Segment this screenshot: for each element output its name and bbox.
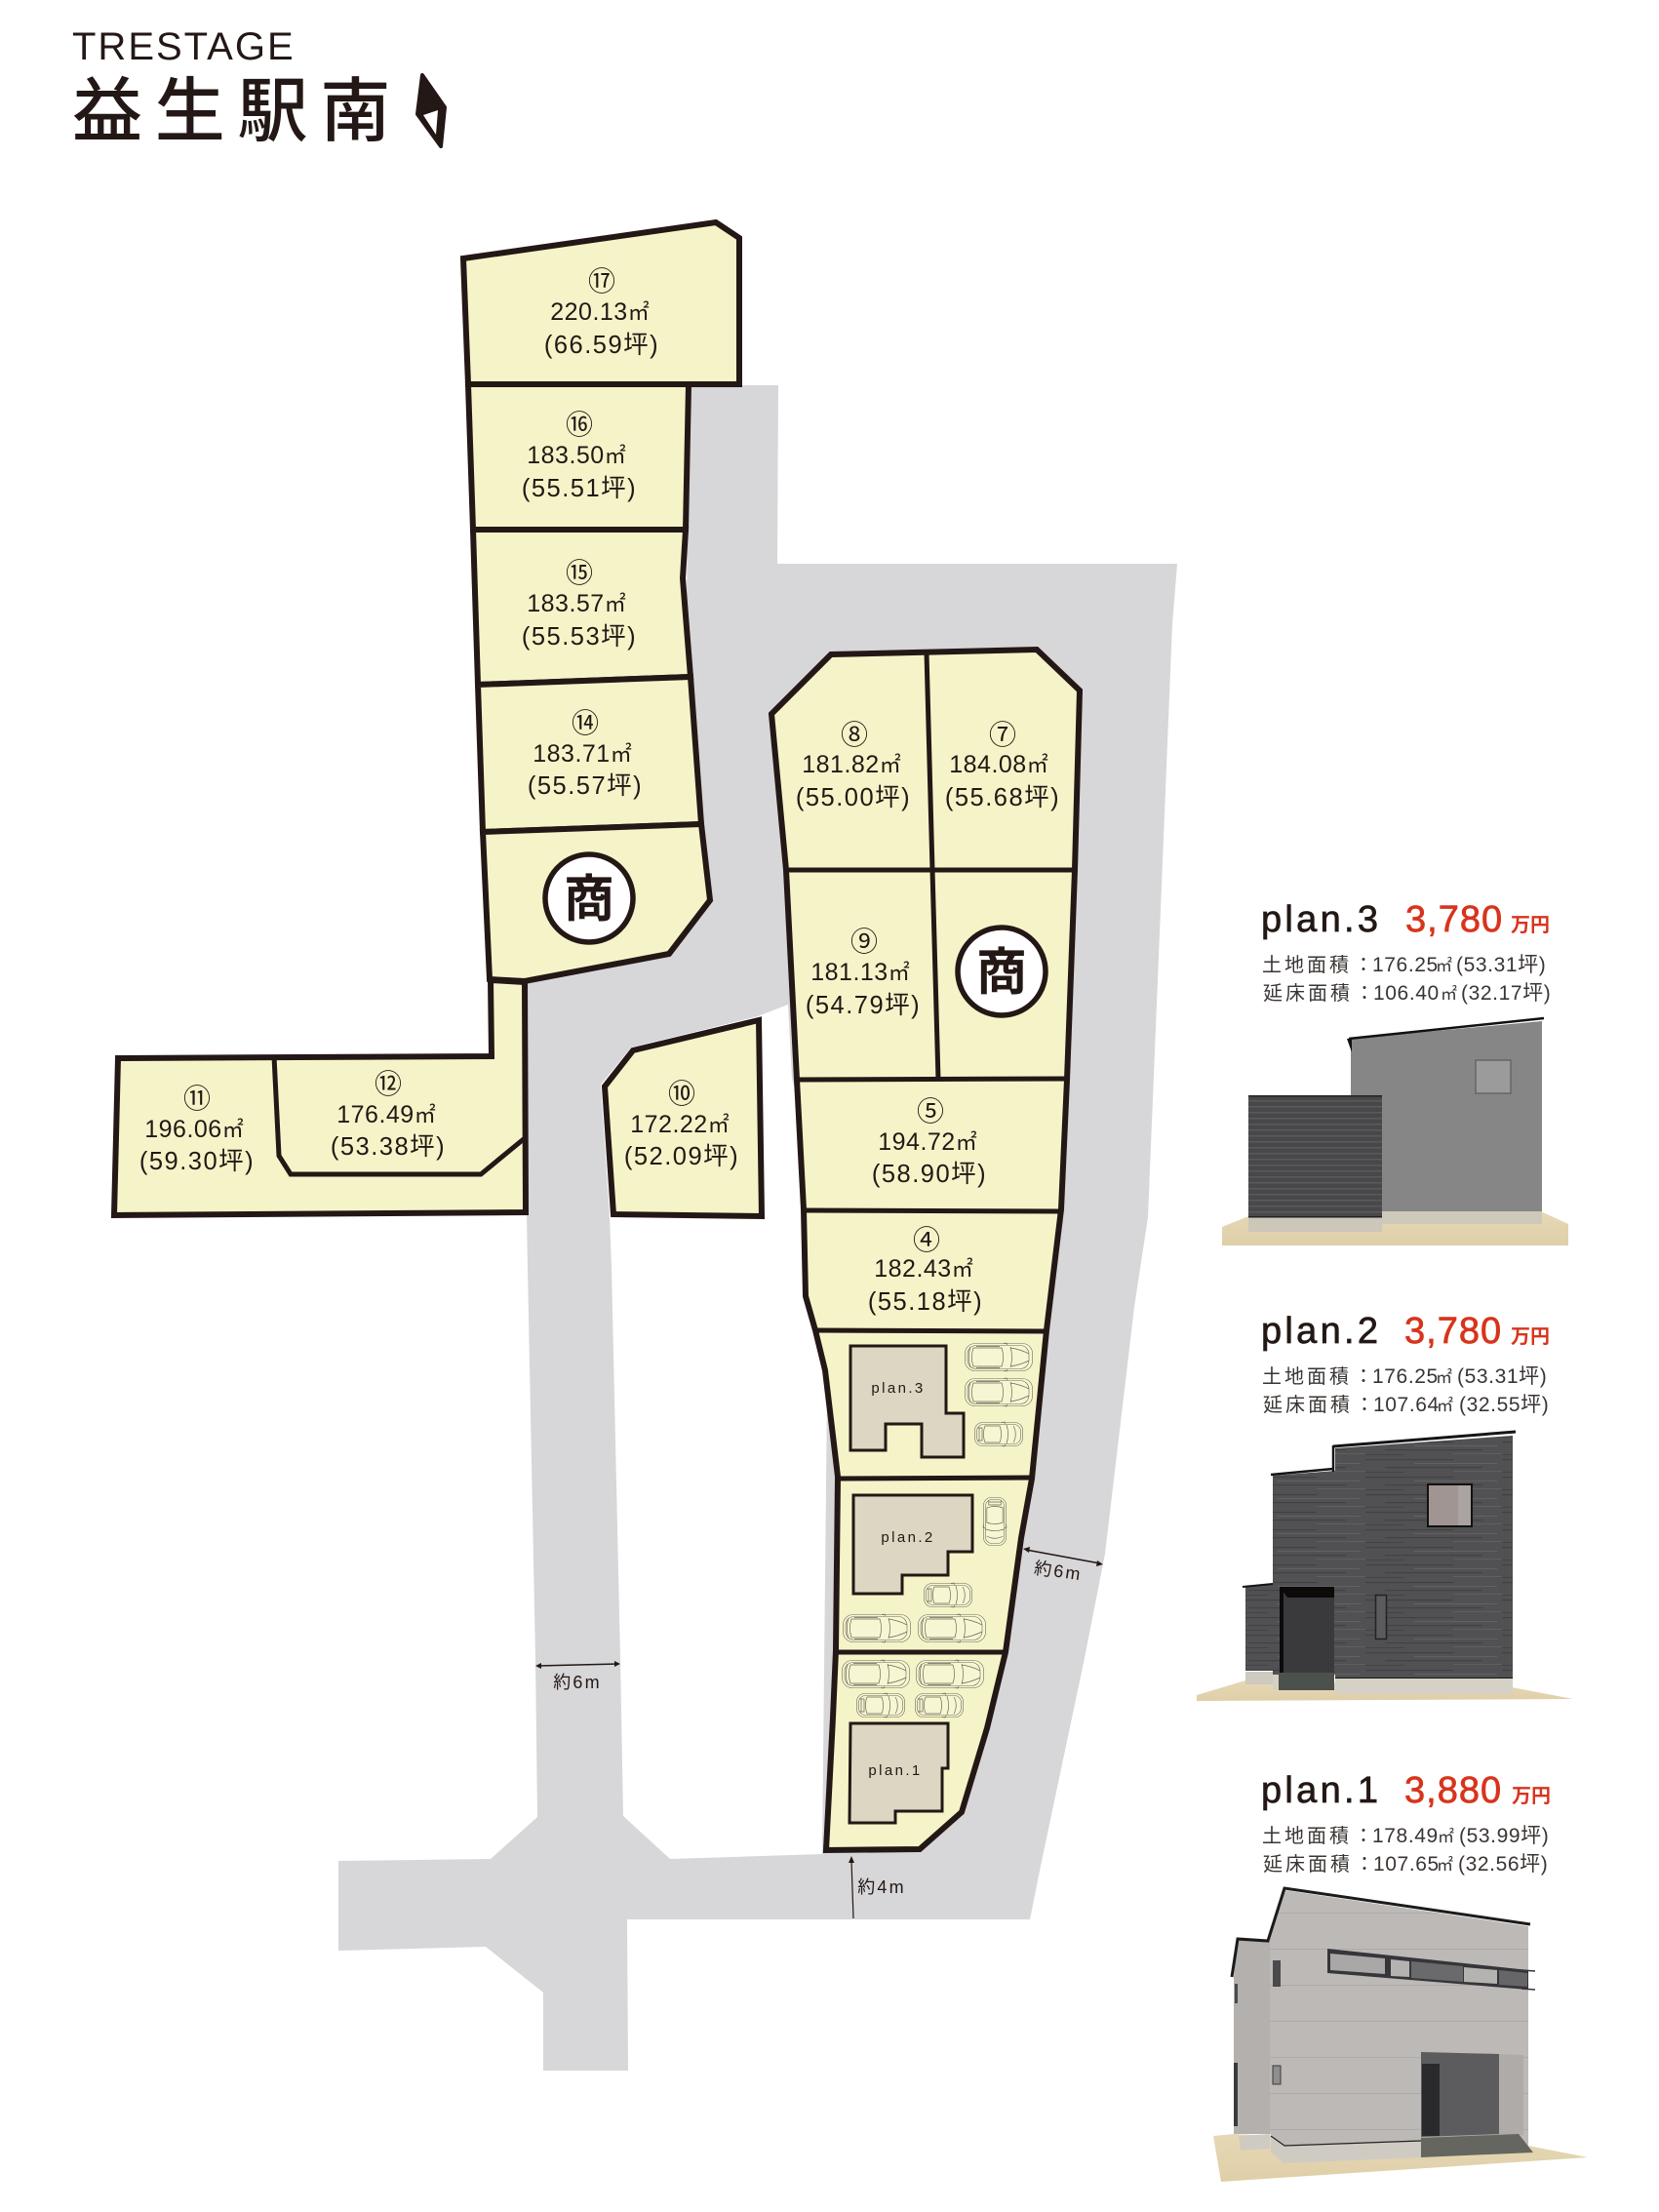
house illustration: plan 3 bbox=[1222, 1018, 1568, 1245]
house illustration: plan 2 bbox=[1197, 1432, 1573, 1701]
panel: lot 15 bbox=[473, 530, 691, 685]
plan 2 site area: 土地面積 bbox=[1262, 1365, 1352, 1388]
panel: plan 2 bbox=[1197, 1311, 1573, 1701]
lot 9 label bbox=[806, 927, 921, 1019]
panel: commercial lot, left block bbox=[483, 824, 710, 981]
plan 1 site area: 178.49 bbox=[1372, 1825, 1439, 1847]
panel: lots 11 and 12: (59.30坪) bbox=[139, 1148, 255, 1175]
plan 2 floor area: 延床面積 bbox=[1263, 1394, 1353, 1416]
lot 5 label bbox=[872, 1096, 987, 1188]
plan 2 heading: plan.2 bbox=[1261, 1311, 1381, 1352]
plan 3 floor area: ㎡ bbox=[1441, 985, 1457, 1004]
lot 4 label: (55.18坪) bbox=[868, 1288, 983, 1316]
dimension: front road width: 約4m bbox=[857, 1877, 906, 1897]
lot 4 label: 182.43㎡ bbox=[874, 1255, 973, 1283]
panel: lot 10: (52.09坪) bbox=[624, 1143, 739, 1170]
dimension: front road width bbox=[849, 1856, 906, 1918]
plan 2 price: 3,780 bbox=[1404, 1311, 1502, 1352]
panel: lot 16: (55.51坪) bbox=[522, 475, 637, 502]
plan 1 floor area: ： bbox=[1355, 1854, 1377, 1876]
lot 7 label: (55.68坪) bbox=[945, 784, 1060, 811]
lot 5 label: 194.72㎡ bbox=[878, 1128, 977, 1156]
plan 1 site area: (53.99坪) bbox=[1459, 1825, 1549, 1847]
road network bbox=[338, 385, 1177, 2071]
plan 1 price: 万円 bbox=[1512, 1780, 1551, 1808]
lot 9 label: (54.79坪) bbox=[806, 992, 921, 1019]
panel: right block of lots bbox=[771, 650, 1080, 1850]
plan 2 floor area: ： bbox=[1355, 1395, 1377, 1416]
plan 2 site area: (53.31坪) bbox=[1457, 1365, 1547, 1388]
lot 9 label: ⑨ bbox=[850, 927, 878, 957]
house footprint: plan 3: plan.3 bbox=[871, 1380, 926, 1397]
panel: lot 16: 183.50㎡ bbox=[527, 442, 626, 469]
dimension: west road width: 約6m bbox=[553, 1673, 602, 1692]
lot 7 label: ⑦ bbox=[989, 720, 1016, 750]
panel: lots 11 and 12: ⑪ bbox=[183, 1084, 211, 1114]
panel: lot 15: ⑮ bbox=[566, 558, 593, 588]
lot 5 label: (58.90坪) bbox=[872, 1161, 987, 1188]
house footprint: plan 2 bbox=[853, 1495, 972, 1594]
plan 1 floor area: 延床面積 bbox=[1263, 1853, 1353, 1876]
lot 7 label bbox=[945, 720, 1060, 811]
plan 3 floor area: 延床面積 bbox=[1263, 982, 1353, 1005]
plan 3 heading: plan.3 bbox=[1261, 899, 1381, 940]
lot 4 label: ④ bbox=[913, 1225, 940, 1255]
plan 2 price: 万円 bbox=[1511, 1321, 1550, 1349]
house footprint: plan 1: plan.1 bbox=[868, 1762, 923, 1779]
panel: lot 10 bbox=[605, 1020, 762, 1216]
panel: lot 10: ⑩ bbox=[668, 1079, 695, 1109]
lot 8 label bbox=[796, 720, 911, 811]
panel: lot 16: ⑯ bbox=[566, 410, 593, 440]
panel: lots 11 and 12: 176.49㎡ bbox=[336, 1101, 436, 1128]
panel: lot 14 bbox=[478, 677, 701, 832]
development name: 益生駅南 bbox=[72, 54, 403, 156]
commercial lot marker: 商 bbox=[976, 931, 1027, 1005]
plan 3 site area: 176.25 bbox=[1372, 954, 1439, 976]
plan 3 floor area: 106.40 bbox=[1373, 982, 1440, 1005]
plan 3 price: 3,780 bbox=[1405, 899, 1503, 940]
panel: lot 10: 172.22㎡ bbox=[630, 1111, 730, 1138]
panel: lot 15: 183.57㎡ bbox=[527, 590, 626, 617]
lot 8 label: 181.82㎡ bbox=[802, 751, 901, 778]
panel: lot 14: (55.57坪) bbox=[528, 772, 643, 800]
panel: lots 11 and 12: (53.38坪) bbox=[331, 1133, 446, 1161]
panel: lots 11 and 12: 196.06㎡ bbox=[144, 1116, 244, 1143]
panel: lot 14: ⑭ bbox=[572, 708, 599, 738]
panel: lot 16 bbox=[468, 384, 689, 530]
lot 9 label: 181.13㎡ bbox=[810, 959, 910, 986]
plan 2 floor area: (32.55坪) bbox=[1459, 1394, 1549, 1416]
panel: lots 11 and 12: ⑫ bbox=[375, 1069, 402, 1099]
plan 3 site area: ㎡ bbox=[1436, 957, 1452, 975]
plan 1 site area: ㎡ bbox=[1438, 1828, 1454, 1846]
plan 1 floor area: (32.56坪) bbox=[1458, 1853, 1548, 1876]
panel: lots 11 and 12 bbox=[114, 980, 526, 1215]
title: brand and development name bbox=[72, 25, 403, 156]
plan 1 floor area: ㎡ bbox=[1437, 1856, 1453, 1875]
plan 3 floor area: ： bbox=[1355, 983, 1377, 1005]
house footprint: plan 2: plan.2 bbox=[881, 1529, 935, 1546]
panel: lot 17: (66.59坪) bbox=[544, 332, 659, 359]
plan 1 site area: ： bbox=[1354, 1826, 1376, 1847]
plan 1 price: 3,880 bbox=[1404, 1770, 1502, 1811]
plan 1 site area: 土地面積 bbox=[1262, 1825, 1352, 1847]
plan 2 site area: ㎡ bbox=[1436, 1368, 1452, 1387]
plan 3 site area: 土地面積 bbox=[1262, 954, 1352, 976]
lot 8 label: ⑧ bbox=[841, 720, 868, 750]
icon: north compass bbox=[417, 75, 445, 146]
house footprint: plan 1 bbox=[849, 1723, 948, 1823]
panel: lot 14: 183.71㎡ bbox=[533, 740, 632, 768]
icon: parked cars bbox=[843, 1343, 1032, 1718]
dimension: east road width bbox=[1023, 1547, 1103, 1584]
panel: lot 15: (55.53坪) bbox=[522, 623, 637, 651]
brand name: TRESTAGE bbox=[72, 25, 296, 68]
panel: commercial lot, left block: 商 bbox=[564, 858, 614, 931]
lot 4 label bbox=[868, 1225, 983, 1316]
panel: lot 17: ⑰ bbox=[588, 266, 615, 296]
house footprint: plan 3 bbox=[850, 1346, 964, 1457]
lot 5 label: ⑤ bbox=[917, 1096, 944, 1126]
dimension: west road width bbox=[535, 1661, 620, 1692]
plan 3 floor area: (32.17坪) bbox=[1461, 982, 1551, 1005]
plan 1 heading: plan.1 bbox=[1261, 1770, 1381, 1811]
panel: lot 17: 220.13㎡ bbox=[550, 298, 650, 326]
lot 8 label: (55.00坪) bbox=[796, 784, 911, 811]
plan 3 price: 万円 bbox=[1511, 909, 1550, 937]
plan 1 floor area: 107.65 bbox=[1373, 1853, 1440, 1876]
panel: plan 3 bbox=[1222, 899, 1568, 1245]
house illustration: plan 1 bbox=[1213, 1888, 1588, 2182]
plan 2 site area: 176.25 bbox=[1372, 1365, 1439, 1388]
plan 3 price bbox=[1405, 899, 1550, 940]
plan 2 floor area: 107.64 bbox=[1373, 1394, 1440, 1416]
plan 2 floor area: ㎡ bbox=[1437, 1397, 1453, 1415]
dimension: east road width: 約6m bbox=[1033, 1559, 1084, 1584]
commercial lot marker bbox=[958, 928, 1046, 1015]
panel: plan 1 bbox=[1213, 1770, 1588, 2182]
plan 2 price bbox=[1404, 1311, 1550, 1352]
plan 3 site area: (53.31坪) bbox=[1456, 954, 1546, 976]
plan 2 site area: ： bbox=[1354, 1366, 1376, 1388]
panel: lot 17 bbox=[463, 222, 739, 384]
lot 7 label: 184.08㎡ bbox=[949, 751, 1048, 778]
plan 1 price bbox=[1404, 1770, 1551, 1811]
plan 3 site area: ： bbox=[1354, 955, 1376, 976]
